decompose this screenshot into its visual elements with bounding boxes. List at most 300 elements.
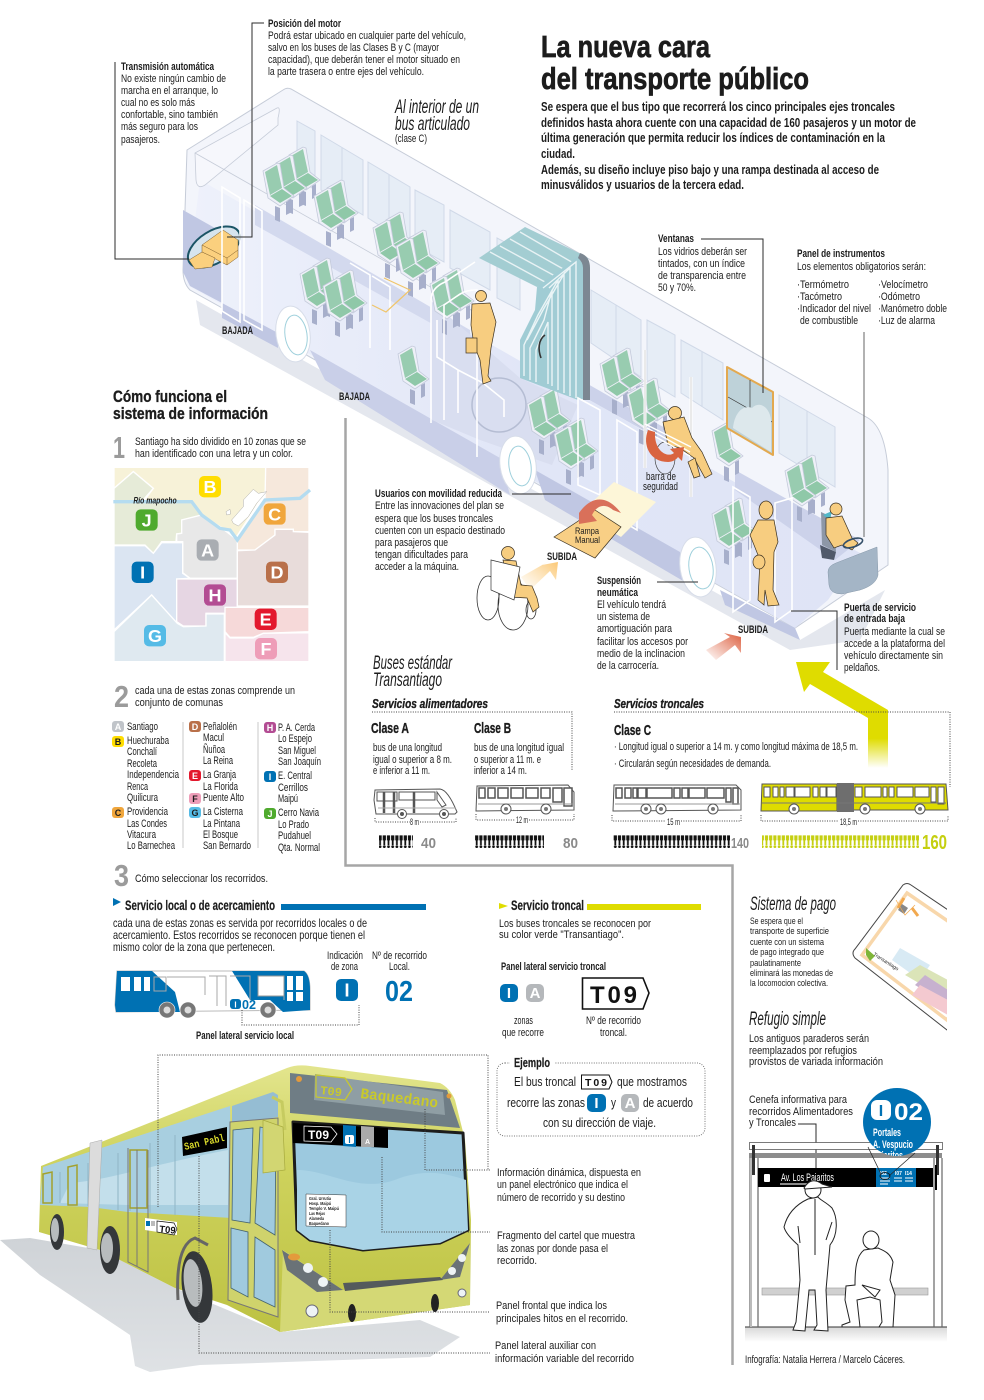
local bus <box>115 971 359 1025</box>
windshield <box>293 1122 468 1250</box>
stops placard: Hosp. Maipú <box>309 1201 331 1206</box>
note: pneumatic suspension: medio de la inclinacion <box>597 648 685 660</box>
example box <box>497 1055 705 1136</box>
heading: interior: bus articulado <box>395 114 470 135</box>
dotted leaders <box>158 1055 490 1353</box>
payment system text: de pago integrado que <box>750 947 824 958</box>
zone legend: La Florida <box>203 781 239 793</box>
standing passenger <box>750 501 779 606</box>
payment system text: paulatinamente <box>750 958 801 969</box>
subida arrow <box>706 633 741 660</box>
note: reduced mobility: Entre las innovaciones del plan se <box>375 500 504 512</box>
zone legend: D <box>192 722 199 732</box>
step 1 <box>113 430 306 465</box>
zone legend: E <box>192 771 198 781</box>
callout: sign fragment: las zonas por donde pasa el <box>497 1243 608 1255</box>
note: instrument panel: Panel de instrumentos <box>797 248 885 260</box>
zone legend: Lo Espejo <box>278 733 312 745</box>
step 2 <box>114 679 295 714</box>
bus class C 15 m: 140 <box>731 835 749 852</box>
route number: 02 <box>385 976 413 1008</box>
standing man <box>784 1181 836 1331</box>
callout: sign fragment <box>497 1230 636 1267</box>
highlighted window <box>727 367 773 455</box>
seated man <box>842 1231 895 1327</box>
label: subida 2: SUBIDA <box>738 624 768 636</box>
zone badges: A <box>530 985 541 1002</box>
route sign T09 <box>582 978 649 1039</box>
class B: inferior a 14 m. <box>474 765 527 777</box>
front route strip: I <box>348 1136 351 1145</box>
illustration: articulated trunk bus <box>0 1065 471 1372</box>
note: automatic transmission: confortable, sino también <box>121 109 218 121</box>
zone map: Río mapocho <box>133 495 177 505</box>
detail circle: 02 <box>894 1099 923 1126</box>
zone legend: Lo Prado <box>278 819 309 831</box>
front route strip <box>293 1123 388 1148</box>
detail circle: Portales <box>873 1127 901 1139</box>
payment system text: la locomocion colectiva. <box>750 978 828 989</box>
route sign T09: T09 <box>590 982 637 1009</box>
note: motor position <box>268 18 466 78</box>
step 3 <box>114 858 268 893</box>
floor <box>187 180 860 628</box>
callout: auxiliary side panel: información variable del recorrido <box>495 1353 634 1365</box>
stops placard: Gral. Urrutia <box>309 1196 331 1201</box>
wheelchair user outside <box>477 546 558 630</box>
note: motor position: Podrá estar ubicado en cualquier parte del vehículo, <box>268 30 466 42</box>
note: pneumatic suspension <box>597 575 688 672</box>
zone legend: J <box>267 809 273 819</box>
title <box>541 29 809 96</box>
headlights and bumper <box>282 1243 470 1322</box>
class B: Clase B <box>474 720 511 737</box>
heading: Servicio local o de acercamiento <box>125 897 275 913</box>
callout: dynamic information: número de recorrido y su destino <box>497 1192 625 1204</box>
panel: trunk services: Servicios troncales <box>614 696 704 711</box>
mirror <box>263 1097 285 1173</box>
note: automatic transmission: pasajeros. <box>121 134 160 146</box>
note: reduced mobility: cuenten con un espacio destinado <box>375 525 505 537</box>
callout: front panel: principales hitos en el recorrido. <box>496 1313 628 1325</box>
class B <box>474 720 564 777</box>
fascia note: y Troncales <box>749 1117 796 1129</box>
class A <box>371 720 452 777</box>
example box: recorre las zonas <box>507 1096 585 1110</box>
zone legend: El Bosque <box>203 829 238 841</box>
simple shelter text: reemplazados por refugios <box>749 1045 857 1057</box>
zone map: H <box>208 585 221 605</box>
panel: trunk services: Clase C <box>614 722 651 739</box>
illustration: articulated bus interior <box>181 88 888 650</box>
step 1: Santiago ha sido dividido en 10 zonas que se <box>135 436 306 448</box>
zone map <box>113 467 310 662</box>
step 2: cada una de estas zonas comprende un <box>135 685 295 697</box>
zone indication <box>327 950 363 1001</box>
zone legend: Maipú <box>278 793 298 805</box>
simple shelter text: Los antiguos paraderos serán <box>749 1033 869 1045</box>
note: pneumatic suspension: un sistema de <box>597 611 650 623</box>
accordion articulation <box>479 227 590 400</box>
example box: que mostramos <box>617 1075 687 1089</box>
destination display: Baquedano <box>359 1086 439 1112</box>
zone legend: Lo Barnechea <box>127 840 176 852</box>
zone map: J <box>142 510 152 530</box>
zone legend: Conchalí <box>127 746 157 758</box>
bus class B <box>475 785 578 852</box>
zone legend: La Cisterna <box>203 806 244 818</box>
stops placard: Las Rejas <box>309 1211 325 1216</box>
zone map: G <box>148 626 162 646</box>
route number: Nº de recorrido <box>372 950 427 962</box>
note: reduced mobility: tengan dificultades para <box>375 549 469 561</box>
fascia note: recorridos Alimentadores <box>749 1106 853 1118</box>
example box: T09 <box>585 1077 607 1089</box>
detail circle: Pajaritos <box>873 1150 903 1162</box>
bus class B: 80 <box>563 835 578 852</box>
note: automatic transmission: más seguro para los <box>121 121 198 133</box>
side destination sign <box>182 1127 227 1156</box>
ramp label: Rampa <box>575 526 600 537</box>
intro text: ciudad. <box>541 147 575 161</box>
payment system text: Se espera que el <box>750 916 803 927</box>
side windows <box>40 1092 278 1218</box>
note: motor position: Posición del motor <box>268 18 342 30</box>
zone legend: La Reina <box>203 755 234 767</box>
note: instrument panel: ·Luz de alarma <box>878 315 936 327</box>
route sign T09: troncal. <box>600 1027 627 1039</box>
bus class A: 8 m <box>410 817 419 828</box>
note: service door: de entrada baja <box>844 613 906 625</box>
zone legend: La Granja <box>203 769 237 781</box>
route sign T09: Nº de recorrido <box>586 1015 641 1027</box>
description: su color verde "Transantiago". <box>499 929 624 941</box>
step 3: Cómo seleccionar los recorridos. <box>135 873 268 885</box>
note: service door: peldaños. <box>844 662 880 674</box>
wheels <box>272 304 720 599</box>
note: windows: tintados, con un índice <box>658 258 745 270</box>
route number <box>372 950 427 1008</box>
example box: El bus troncal <box>514 1075 576 1089</box>
step 2: conjunto de comunas <box>135 697 223 709</box>
zone legend: P. A. Cerda <box>278 722 316 734</box>
zone badges <box>500 984 544 1039</box>
ramp label <box>575 526 600 546</box>
callout: auxiliary side panel <box>495 1340 634 1365</box>
passenger with briefcase <box>466 290 496 384</box>
driver <box>820 503 864 560</box>
zone legend: Cerro Navia <box>278 807 320 819</box>
note: instrument panel: ·Velocímetro <box>878 279 928 291</box>
heading: standard buses: Buses estándar <box>373 653 452 674</box>
note: service door: accede a la plataforma del <box>844 638 945 650</box>
zone legend: Huechuraba <box>127 735 170 747</box>
panel: local service <box>113 897 427 1042</box>
wheelchair passenger on board <box>645 406 712 478</box>
note: motor position: la parte trasera o entre ejes del vehículo. <box>268 66 424 78</box>
engine <box>181 218 247 276</box>
zone legend: La Pintana <box>203 818 241 830</box>
heading: information system <box>113 387 268 423</box>
zone legend: Quilicura <box>127 792 159 804</box>
zone legend: Independencia <box>127 769 180 781</box>
step 1: han identificado con una letra y un color. <box>135 448 293 460</box>
class A: bus de una longitud <box>373 742 442 754</box>
side route sign <box>145 1218 177 1237</box>
detail circle: A. Vespucio <box>873 1139 913 1151</box>
heading: standard buses: Transantiago <box>373 670 442 691</box>
intro text: Además, su diseño incluye piso bajo y una rampa destinada al acceso de <box>541 163 879 177</box>
description: mismo color de la zona que pertenecen. <box>113 940 275 954</box>
callout: sign fragment: Fragmento del cartel que muestra <box>497 1230 636 1242</box>
note: automatic transmission: Transmisión automática <box>121 61 215 73</box>
note: motor position: salvo en los buses de las Clases B y C (mayor <box>268 42 439 54</box>
note: instrument panel: ·Tacómetro <box>797 291 842 303</box>
ramp floor <box>580 482 656 537</box>
note: windows: 50 y 70%. <box>658 282 696 294</box>
note: windows: Ventanas <box>658 233 694 245</box>
fascia note <box>749 1094 853 1180</box>
note: reduced mobility: acceder a la máquina. <box>375 561 459 573</box>
bus class C articulated 18.5 m <box>761 783 948 854</box>
zone map: I <box>140 563 145 583</box>
bus class C 15 m: 15 m <box>667 817 680 828</box>
heading: information system: sistema de información <box>113 404 268 423</box>
zone legend: Peñalolén <box>203 721 237 733</box>
intro text <box>541 100 916 192</box>
floor around articulation <box>430 300 578 465</box>
zone legend: San Joaquín <box>278 756 321 768</box>
intro text: Se espera que el bus tipo que recorrerá los cinco principales ejes troncales <box>541 100 895 114</box>
label: bajada 1: BAJADA <box>222 325 253 337</box>
zone legend: Vitacura <box>127 829 157 841</box>
zone legend: Puente Alto <box>203 792 244 804</box>
callout: dynamic information: un panel electrónico que indica el <box>497 1179 628 1191</box>
zone map: E <box>260 610 272 630</box>
underbody and platforms <box>183 205 860 640</box>
callout: sign fragment: recorrido. <box>497 1255 537 1267</box>
stops placard: Baquedano <box>309 1221 329 1226</box>
zone map: C <box>268 504 281 524</box>
note: service door: Puerta de servicio <box>844 602 916 614</box>
example box: I <box>594 1095 599 1112</box>
zone legend <box>112 721 321 854</box>
ramp label: Manual <box>575 535 600 546</box>
note: automatic transmission: cual no es solo más <box>121 97 195 109</box>
stops placard: Templo V. Maipú <box>309 1206 339 1211</box>
front route strip: T09 <box>308 1128 329 1142</box>
frame line: standard buses <box>346 418 732 1365</box>
zone legend: H <box>267 723 273 733</box>
zone map: A <box>201 540 214 560</box>
note: pneumatic suspension: de la carrocería. <box>597 660 659 672</box>
heading: information system: Cómo funciona el <box>113 387 227 406</box>
note: instrument panel: ·Termómetro <box>797 279 849 291</box>
route number: Local. <box>389 961 410 973</box>
heading <box>113 897 426 913</box>
description: cada una de estas zonas es servida por recorridos locales o de <box>113 916 367 930</box>
side windows <box>297 121 835 487</box>
fascia sign: I14 <box>905 1171 912 1177</box>
note: pneumatic suspension: amortiguación para <box>597 623 673 635</box>
dashboard <box>828 547 878 594</box>
title: del transporte público <box>541 61 809 96</box>
class A: e inferior a 11 m. <box>373 765 430 777</box>
callout: dynamic information: Información dinámica, dispuesta en <box>497 1167 641 1179</box>
leader lines <box>115 23 864 670</box>
doors and handrails <box>222 187 792 622</box>
bus class B: 12 m <box>516 815 528 826</box>
zone legend: C <box>115 808 122 818</box>
smart card: Transantiago <box>872 952 900 973</box>
example box: Ejemplo <box>514 1055 550 1070</box>
zone legend: Pudahuel <box>278 830 311 842</box>
note: service door <box>844 602 945 674</box>
zone legend: Santiago <box>127 721 158 733</box>
zone legend: Renca <box>127 781 149 793</box>
bus class C articulated 18.5 m: 18,5 m <box>840 817 857 828</box>
note: pneumatic suspension: Suspensión <box>597 575 641 587</box>
bus class C articulated 18.5 m: 160 <box>922 832 947 854</box>
callout: auxiliary side panel: Panel lateral auxiliar con <box>495 1340 596 1352</box>
example box: de acuerdo <box>643 1096 693 1110</box>
bench <box>762 1288 928 1295</box>
zone legend: Providencia <box>127 806 169 818</box>
bus class A <box>374 789 457 852</box>
panel: feeder services: Servicios alimentadores <box>372 696 488 711</box>
zone map: D <box>270 563 283 583</box>
bus shelter <box>745 1088 947 1342</box>
intro text: minusválidos y usuarios de la tercera edad. <box>541 178 744 192</box>
callout: dynamic information <box>497 1167 641 1204</box>
fascia note: Cenefa informativa para <box>749 1094 848 1106</box>
zone map: B <box>203 477 216 497</box>
payment system text: eliminará las monedas de <box>750 968 833 979</box>
zone legend: Macul <box>203 732 224 744</box>
zone map: F <box>260 639 271 659</box>
intro text: última generación que permita reducir los índices de contaminación en la <box>541 131 886 145</box>
zone indication: Indicación <box>327 950 363 962</box>
fascia sign <box>758 1168 933 1187</box>
description: Los buses troncales se reconocen por <box>499 918 651 930</box>
panel: trunk services: · Circularán según necesidades de demanda. <box>614 758 771 770</box>
title: La nueva cara <box>541 29 711 64</box>
fascia sign: Av. Los Pajaritos <box>781 1172 834 1184</box>
example box: A <box>625 1095 636 1112</box>
side destination sign: San Pabl <box>183 1133 226 1154</box>
description: acercamiento. Estos recorridos se reconocen porque tienen el <box>113 928 365 942</box>
zone legend: Qta. Normal <box>278 842 320 854</box>
heading: interior: (clase C) <box>395 133 427 145</box>
zone legend: I <box>269 772 271 782</box>
heading: Servicio troncal <box>511 897 584 913</box>
heading: interior: Al interior de un <box>394 97 479 118</box>
articulation bellows <box>87 1140 102 1250</box>
note: service door: vehículo directamente sin <box>844 650 943 662</box>
note: pneumatic suspension: neumática <box>597 587 639 599</box>
panel: trunk services: · Longitud igual o superior a 14 m. y como longitud máxima de 18,5 m. <box>614 741 858 753</box>
note: instrument panel: ·Odómetro <box>878 291 920 303</box>
note: windows: Los vidrios deberán ser <box>658 246 747 258</box>
smart card <box>852 883 947 1030</box>
destination display: T09 <box>320 1084 343 1100</box>
side route sign: T09 <box>159 1224 176 1237</box>
example box: con su dirección de viaje. <box>543 1116 656 1130</box>
panel: feeder services <box>371 696 578 852</box>
rear roof hatch <box>195 108 279 187</box>
note: service door: Puerta mediante la cual se <box>844 626 945 638</box>
class A: igual o superior a 8 m. <box>373 754 452 766</box>
connector to detail <box>868 1147 915 1176</box>
panel: trunk services <box>612 696 950 854</box>
payment system text: cuente con un sistema <box>750 937 825 948</box>
credit: Infografía: Natalia Herrera / Marcelo Cáceres. <box>745 1354 905 1366</box>
heading <box>499 897 701 913</box>
label: panel lateral: Panel lateral servicio local <box>196 1030 294 1042</box>
zone legend: San Miguel <box>278 745 316 757</box>
zone legend: Recoleta <box>127 758 158 770</box>
note: automatic transmission: No existe ningún cambio de <box>121 73 226 85</box>
payment system text: transporte de superficie <box>750 926 829 937</box>
zone indication: de zona <box>331 961 359 973</box>
zone legend: Ñuñoa <box>203 743 226 756</box>
fascia sign: I02 <box>880 1171 887 1177</box>
zone badges: que recorre <box>502 1027 544 1039</box>
simple shelter text: Refugio simple <box>749 1009 826 1030</box>
class B: bus de una longitud igual <box>474 742 564 754</box>
zone legend: F <box>192 794 198 804</box>
note: windows: de transparencia entre <box>658 270 746 282</box>
detail circle: I <box>879 1103 883 1120</box>
class A: Clase A <box>371 720 409 737</box>
bus class C 15 m <box>612 785 749 852</box>
note: windows <box>658 233 747 294</box>
rows of green seats <box>263 147 829 565</box>
front route strip: A <box>365 1139 370 1146</box>
stops placard: Alameda <box>309 1216 324 1221</box>
body <box>39 1065 471 1332</box>
simple shelter text <box>749 1009 883 1068</box>
note: pneumatic suspension: El vehículo tendrá <box>597 599 667 611</box>
label: safety bar: barra de <box>646 471 676 483</box>
fascia sign: I07 <box>895 1171 902 1177</box>
stops placard <box>306 1194 346 1227</box>
step 3: 3 <box>114 858 129 893</box>
description <box>499 918 651 941</box>
payment system text <box>750 894 836 989</box>
shadow <box>0 1238 460 1372</box>
bus shell <box>183 88 888 628</box>
label: safety bar <box>643 471 678 493</box>
payment system text: Sistema de pago <box>750 894 836 915</box>
zone legend: B <box>115 737 122 747</box>
bus ground shadow <box>196 300 885 650</box>
zone badges: I <box>507 985 511 1002</box>
detail circle <box>863 1088 931 1162</box>
local bus: I <box>234 1000 237 1010</box>
note: reduced mobility: para pasajeros que <box>375 537 448 549</box>
note: reduced mobility: espera que los buses troncales <box>375 513 493 525</box>
zone legend: G <box>191 808 199 818</box>
zone indication: I <box>344 980 350 1000</box>
label: side panel: Panel lateral servicio troncal <box>501 961 606 973</box>
zone legend: Cerrillos <box>278 782 308 794</box>
note: instrument panel: ·Indicador del nivel <box>797 303 871 315</box>
note: instrument panel <box>797 248 947 327</box>
local bus: 02 <box>242 997 256 1012</box>
description <box>113 916 367 954</box>
step 2: 2 <box>114 679 129 714</box>
